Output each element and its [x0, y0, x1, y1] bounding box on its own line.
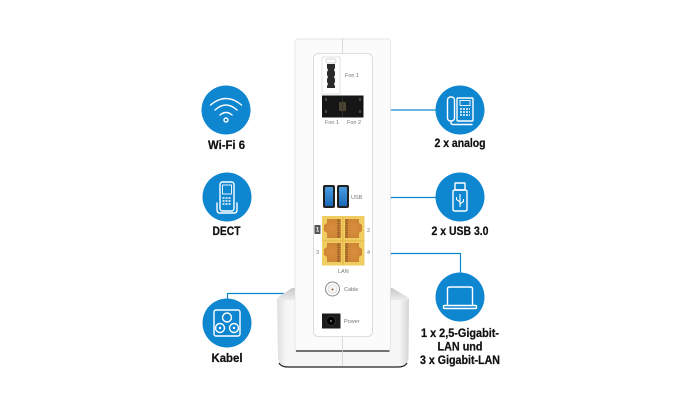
port: LAN: 3 — [316, 250, 319, 256]
label: Kabel: Kabel — [212, 351, 242, 365]
port: LAN: LAN — [338, 269, 349, 275]
icon: coax connectors — [202, 298, 252, 348]
port: Fon 1 / Fon 2 RJ11 — [322, 96, 364, 126]
feature: Kabel — [202, 298, 252, 365]
label: LAN speeds — [420, 326, 500, 367]
router device — [277, 38, 409, 367]
port: Fon 1 / Fon 2 RJ11: Fon 1 — [325, 120, 339, 126]
feature: 2 x analog — [434, 86, 486, 150]
port: LAN: 4 — [367, 250, 370, 256]
icon: USB stick — [436, 172, 484, 222]
feature: DECT — [202, 172, 252, 238]
label: 2 x analog: 2 x analog — [434, 136, 486, 150]
port: Fon 1 TAE: Fon 1 — [345, 73, 359, 79]
port: Cable — [326, 282, 358, 296]
port: Power: Power — [344, 319, 360, 325]
icon: wifi — [202, 86, 250, 134]
icon: laptop — [436, 272, 484, 322]
connector line: LAN — [390, 254, 460, 274]
port: Cable: Cable — [344, 287, 358, 293]
port: Fon 1 TAE — [322, 57, 359, 94]
label: 2 x USB 3.0: 2 x USB 3.0 — [432, 224, 489, 238]
port panel — [314, 54, 372, 336]
port: LAN: 2 — [367, 228, 370, 234]
port: USB — [323, 185, 363, 208]
port: LAN: 1 — [316, 228, 320, 234]
router body — [295, 38, 390, 366]
label: Wi-Fi 6: Wi-Fi 6 — [208, 138, 245, 152]
port: LAN — [314, 216, 370, 275]
connector line: 2 x USB 3.0 — [390, 196, 437, 198]
feature: LAN — [420, 272, 500, 367]
connector line: Kabel — [228, 294, 284, 300]
connector line: 2 x analog — [390, 109, 437, 111]
port: USB: USB — [351, 195, 363, 201]
label: LAN speeds: LAN und — [438, 340, 482, 354]
charging base — [277, 288, 409, 367]
port: Fon 1 / Fon 2 RJ11: Fon 2 — [347, 120, 361, 126]
port: Power — [322, 314, 360, 328]
feature: 2 x USB 3.0 — [432, 172, 489, 238]
icon: DECT handset — [202, 172, 252, 222]
label: DECT: DECT — [212, 224, 241, 238]
icon: desk phone — [436, 86, 484, 134]
feature: Wi-Fi 6 — [202, 86, 250, 152]
label: LAN speeds: 3 x Gigabit-LAN — [420, 353, 500, 367]
label: LAN speeds: 1 x 2,5-Gigabit- — [421, 326, 499, 340]
